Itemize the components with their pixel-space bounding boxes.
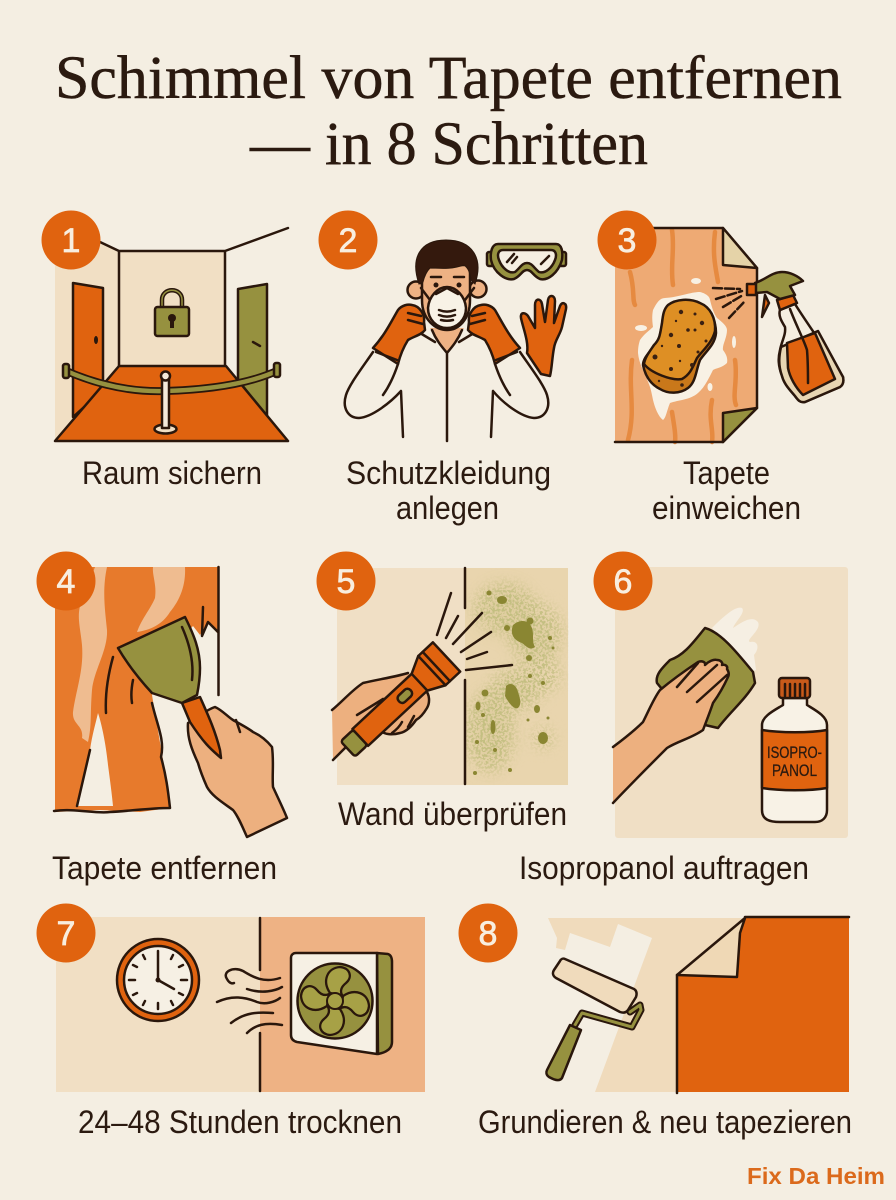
number badge 3: 3: [618, 222, 636, 260]
number badge 8: [458, 904, 518, 962]
number badge 6: [594, 552, 652, 610]
soap splash: [635, 278, 736, 420]
icon: isopropanol bottle: ISOPRO-: [767, 743, 822, 762]
icon: flashlight with hand: [332, 593, 512, 764]
panel: step 7 trocknen: [36, 904, 425, 1140]
number badge 1: 1: [62, 222, 80, 260]
icon: isopropanol bottle: [762, 678, 827, 822]
number badge 4: [36, 552, 96, 610]
icon: paint roller: [546, 959, 641, 1080]
mould patches: [466, 584, 561, 775]
label: Isopropanol auftragen: [519, 850, 809, 886]
number badge 5: 5: [337, 563, 355, 601]
head with mask: [408, 240, 486, 330]
wallpaper sheet: [615, 228, 757, 442]
number badge 3: [598, 210, 656, 270]
divider line: [464, 568, 466, 784]
brand logo text: Fix Da Heim: [747, 1163, 885, 1189]
panel: step 6 Isopropanol auftragen: [519, 552, 848, 886]
wiped streak: [712, 608, 759, 672]
panel: step 5 Wand ueberpruefen: [316, 552, 568, 832]
number badge 2: 2: [339, 222, 357, 260]
title: [55, 45, 842, 178]
label: [346, 455, 551, 526]
number badge 5: [316, 552, 376, 610]
label: einweichen: [652, 490, 801, 526]
label: anlegen: [396, 490, 499, 526]
panel: step 8 neu tapezieren: [458, 904, 852, 1140]
label: Grundieren & neu tapezieren: [478, 1104, 852, 1140]
panel: step 3 Tapete einweichen: [598, 210, 843, 526]
two-tone wall: [56, 917, 425, 1092]
label: Raum sichern: [82, 455, 262, 491]
title: — in 8 Schritten: [249, 111, 648, 178]
number badge 6: 6: [614, 563, 632, 601]
panel: step 4 Tapete entfernen: [36, 552, 287, 886]
panel: step 2 Schutzkleidung: [318, 210, 566, 526]
label: Wand überprüfen: [338, 796, 567, 832]
wall background: [337, 568, 568, 785]
icon: fan: [291, 953, 392, 1054]
number badge 4: 4: [57, 563, 75, 601]
number badge 7: [36, 904, 96, 962]
icon: padlock: [155, 290, 189, 336]
label: 24–48 Stunden trocknen: [78, 1104, 402, 1140]
icon: goggles: [487, 244, 566, 279]
icon: spare glove: [521, 296, 566, 376]
room illustration: [55, 225, 288, 441]
primed wall: [548, 918, 745, 1092]
icon: scraper and hand: [118, 617, 287, 837]
torn wallpaper: [54, 567, 218, 812]
wall background: [615, 567, 848, 838]
barrier rope and post: [63, 363, 280, 434]
panel: step 1 Raum sichern: [42, 210, 288, 491]
icon: clock: [117, 939, 199, 1021]
gloves on hands: [373, 305, 520, 364]
icon: cloth and hand: [613, 628, 755, 803]
air flow lines: [217, 969, 282, 1033]
label: Tapete: [683, 455, 770, 491]
icon: isopropanol bottle: PANOL: [772, 761, 817, 780]
title: Schimmel von Tapete entfernen: [55, 45, 842, 112]
icon: sponge: [643, 300, 716, 393]
number badge 8: 8: [479, 915, 497, 953]
label: Tapete entfernen: [52, 850, 277, 886]
icon: spray bottle: [713, 272, 843, 402]
new wallpaper with curled corner: [677, 917, 849, 1093]
label: Schutzkleidung: [346, 455, 551, 491]
number badge 2: [318, 210, 378, 270]
label: [652, 455, 801, 526]
protective suit: [345, 328, 548, 441]
number badge 7: 7: [57, 915, 75, 953]
number badge 1: [42, 210, 100, 270]
